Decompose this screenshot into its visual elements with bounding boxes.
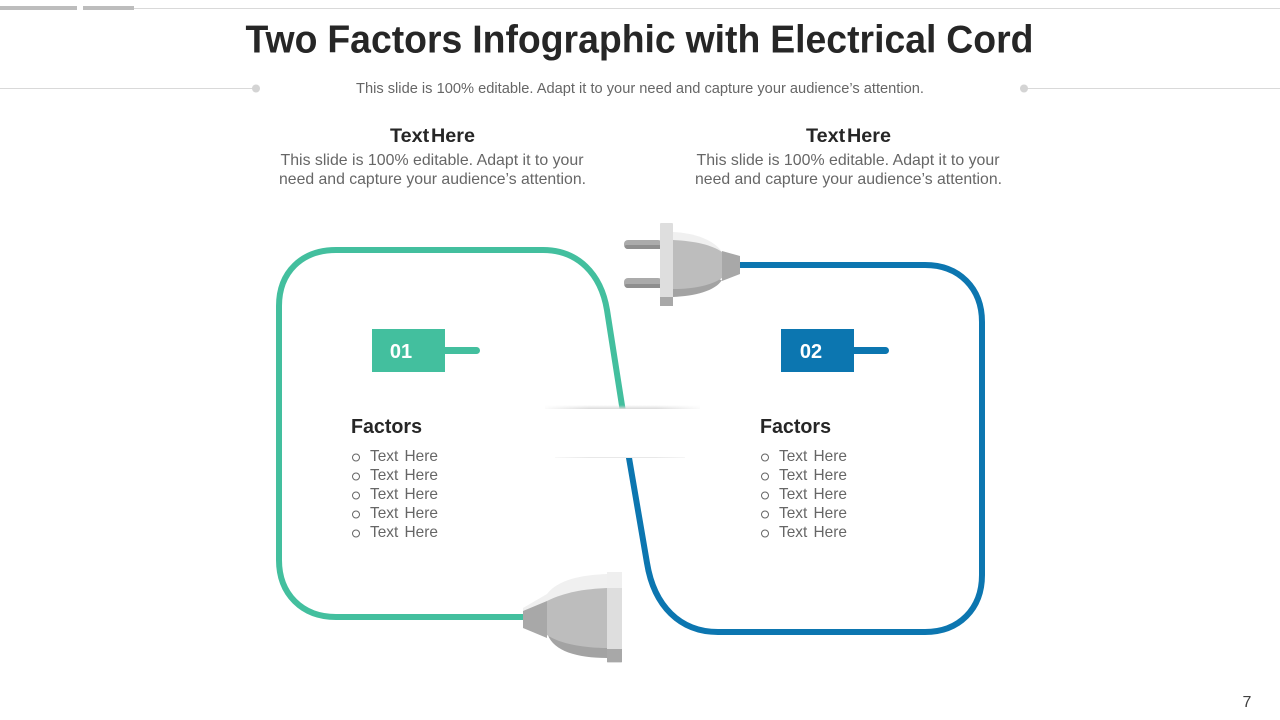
list: factors right: Text Here — [779, 486, 847, 503]
subtitle: This slide is 100% editable. Adapt it to your need and capture your audience’s attention. — [356, 81, 924, 97]
subtitle rule right — [1020, 84, 1280, 92]
list: factors left: Text Here — [370, 448, 438, 465]
icon: bottom plug — [523, 572, 622, 663]
green cord — [279, 250, 623, 617]
list: factors left: Text Here — [370, 486, 438, 503]
text block: left heading: This slide is 100% editable. Adapt it to your — [280, 152, 584, 169]
subtitle rule left — [0, 84, 260, 92]
fold band across cords — [530, 403, 720, 459]
blue cord — [628, 265, 982, 632]
badge 02 — [781, 329, 889, 372]
list: factors right — [760, 416, 847, 541]
text block: right heading: Text Here — [806, 126, 891, 147]
text block: right heading: This slide is 100% editable. Adapt it to your — [696, 152, 1000, 169]
list: factors right: Factors — [760, 416, 831, 438]
list: factors left: Factors — [351, 416, 422, 438]
list: factors right: Text Here — [779, 505, 847, 522]
list: factors right: Text Here — [779, 448, 847, 465]
text block: right heading — [695, 126, 1002, 188]
badge 01 — [372, 329, 480, 372]
text block: left heading — [279, 126, 586, 188]
list: factors right: Text Here — [779, 467, 847, 484]
text block: right heading: need and capture your audience’s attention. — [695, 171, 1002, 188]
list: factors left — [351, 416, 438, 541]
list: factors left: Text Here — [370, 467, 438, 484]
badge 01: 01 — [390, 341, 412, 363]
list: factors left: Text Here — [370, 505, 438, 522]
top decorative bar — [0, 6, 1280, 10]
text block: left heading: need and capture your audience’s attention. — [279, 171, 586, 188]
icon: top plug — [624, 223, 740, 306]
title: Two Factors Infographic with Electrical Cord — [246, 18, 1034, 62]
text block: left heading: Text Here — [390, 126, 475, 147]
list: factors right: Text Here — [779, 524, 847, 541]
list: factors left: Text Here — [370, 524, 438, 541]
page number: 7 — [1243, 694, 1252, 711]
badge 02: 02 — [800, 341, 822, 363]
